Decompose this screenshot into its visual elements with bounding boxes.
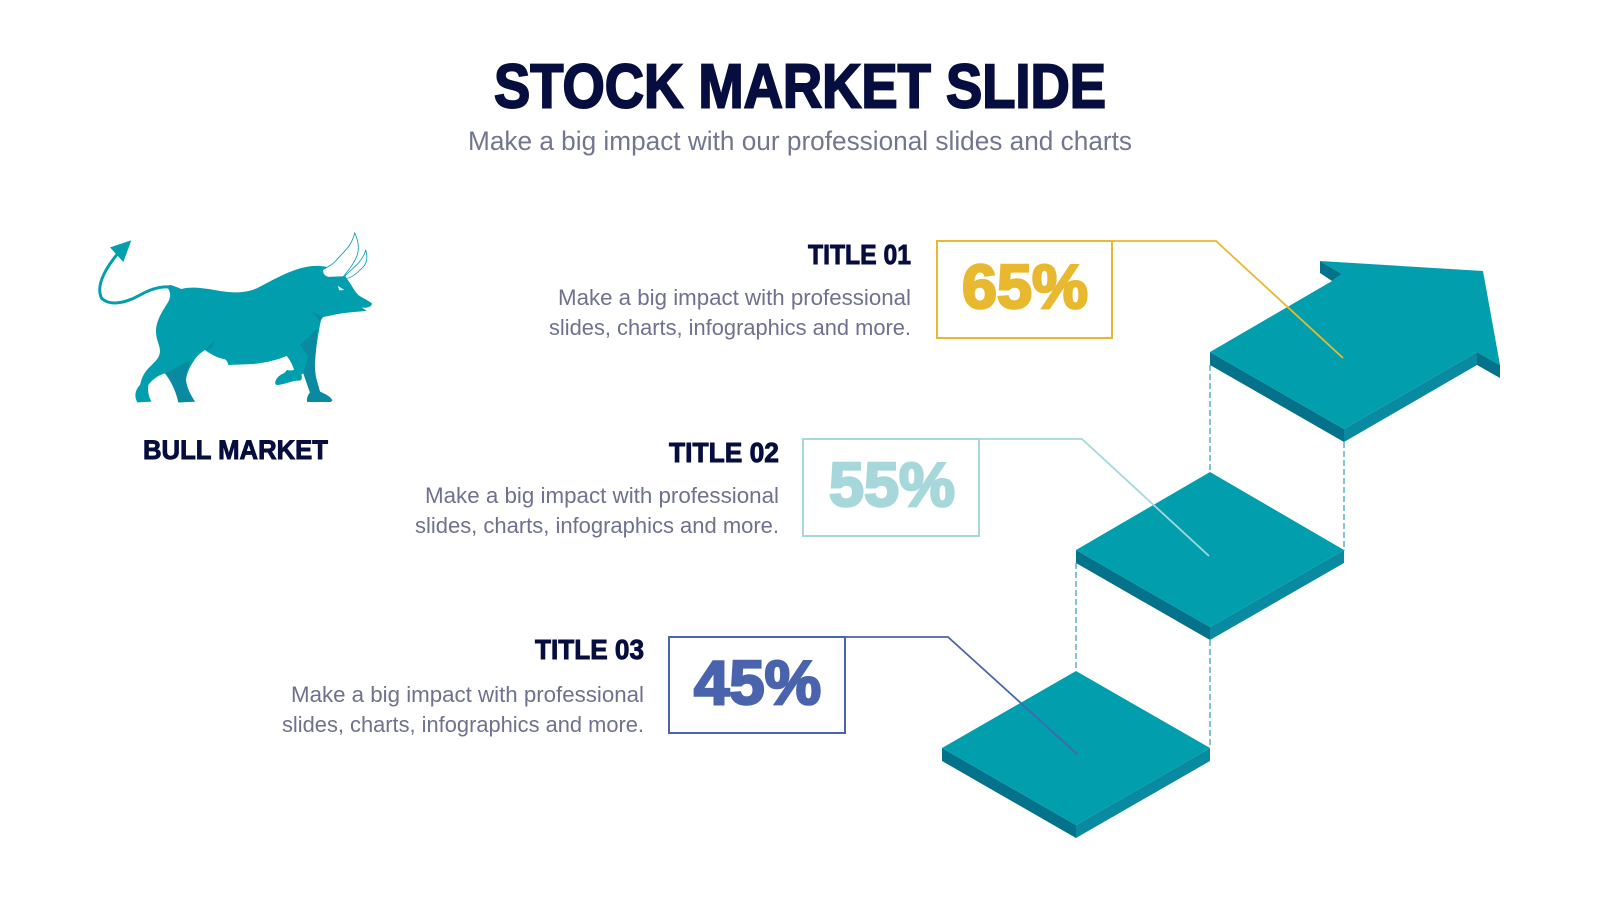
title: STOCK MARKET SLIDE [494, 52, 1106, 122]
description 01 [549, 285, 911, 340]
bull market label: BULL MARKET [143, 435, 328, 465]
description 02: slides, charts, infographics and more. [415, 513, 779, 538]
subtitle: Make a big impact with our professional slides and charts [468, 126, 1132, 156]
step 1 arrow head platform [1210, 261, 1500, 442]
heading 03: TITLE 03 [535, 634, 644, 665]
leader line 02 [979, 439, 1209, 556]
description 01: slides, charts, infographics and more. [549, 315, 911, 340]
description 02 [415, 483, 779, 538]
step 2 middle platform [1076, 472, 1344, 640]
staircase arrow chart [942, 261, 1500, 838]
panel: title 02 [415, 437, 1209, 556]
value box 01 [937, 241, 1112, 338]
bull body [135, 266, 372, 402]
value 55%: 55% [829, 451, 955, 520]
description 03: Make a big impact with professional [291, 682, 644, 707]
bull horns [323, 233, 367, 278]
icon: bull [100, 233, 372, 402]
dashed connectors [1076, 365, 1344, 748]
bull shading [165, 312, 332, 402]
value 65%: 65% [962, 253, 1088, 322]
description 03 [282, 682, 644, 737]
value box 02 [803, 439, 979, 536]
panel: title 03 [282, 634, 1077, 754]
value box 03 [669, 637, 845, 733]
heading 02: TITLE 02 [669, 437, 779, 468]
description 02: Make a big impact with professional [425, 483, 779, 508]
description 01: Make a big impact with professional [558, 285, 911, 310]
heading 01: TITLE 01 [808, 239, 911, 270]
bull tail [100, 240, 175, 303]
leader line 01 [1112, 241, 1343, 358]
value 45%: 45% [694, 649, 821, 718]
panel: title 01 [549, 239, 1343, 358]
leader line 03 [845, 637, 1077, 754]
step 3 bottom platform [942, 671, 1210, 838]
bull eye [338, 286, 344, 290]
description 03: slides, charts, infographics and more. [282, 712, 644, 737]
